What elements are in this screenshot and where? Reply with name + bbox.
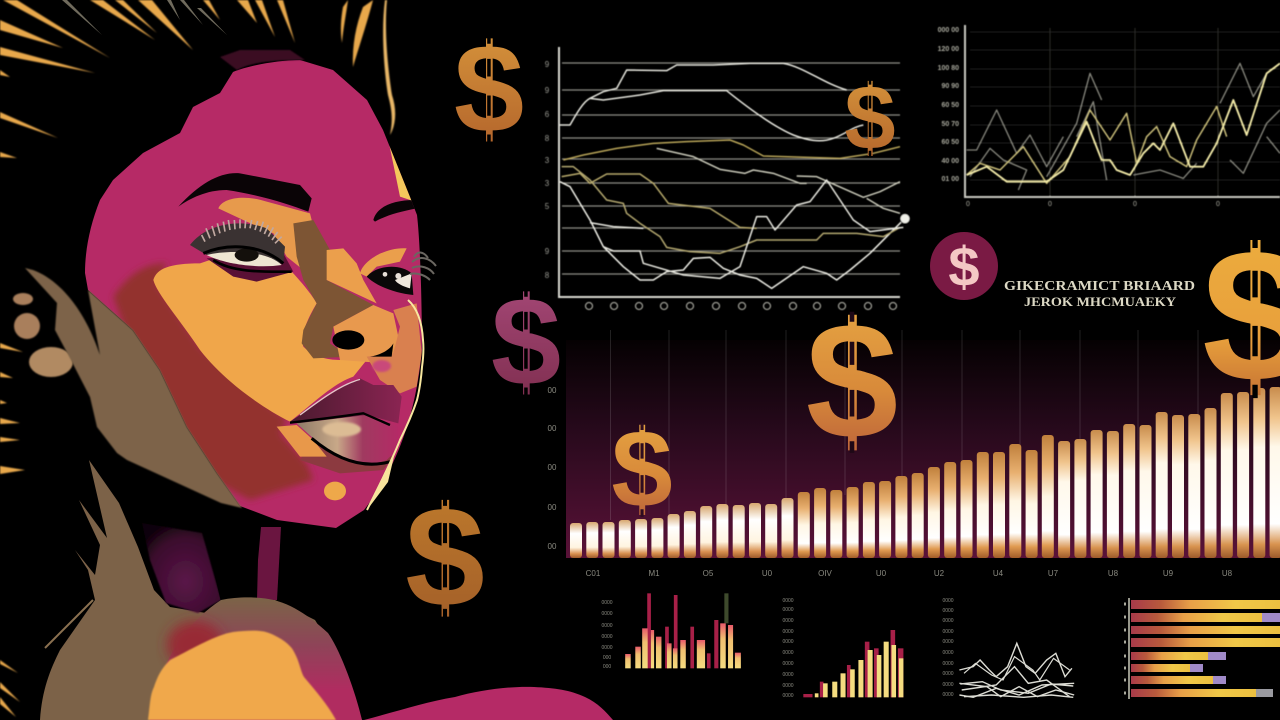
mini D ticks <box>1124 604 1126 693</box>
bar chart panel <box>566 340 1280 558</box>
mini B labels: 0000 <box>782 661 794 667</box>
bar chart x labels: O5 <box>703 569 714 578</box>
mini A bars <box>625 593 741 668</box>
red cheek shade <box>113 263 313 500</box>
chart2 x ticks: 0 <box>1216 201 1220 208</box>
mini B labels: 0000 <box>782 639 794 645</box>
chart2 grid <box>970 28 1280 196</box>
shoulder highlight <box>148 631 336 720</box>
bars: right section <box>1058 387 1280 558</box>
mini A labels <box>601 600 613 670</box>
lip highlight <box>322 422 361 437</box>
chart2 y labels: 120 00 <box>938 46 959 53</box>
lash strokes <box>202 219 282 243</box>
bar chart x labels: U4 <box>993 569 1004 578</box>
nostril <box>332 330 364 350</box>
chin shadow <box>300 444 392 474</box>
chart1 y labels: 9 <box>545 247 550 256</box>
bar chart x labels: U8 <box>1222 569 1233 578</box>
chart2 x ticks <box>966 201 1220 208</box>
chart1 y labels: 9 <box>545 86 550 95</box>
mini D gradient bars <box>1131 600 1280 697</box>
line chart: multi-series top middle <box>545 47 910 310</box>
mini C lines <box>959 643 1074 697</box>
dollar sign: on line chart: $ <box>844 67 896 169</box>
bar chart x labels: C01 <box>586 569 601 578</box>
neck thin arm <box>45 600 93 648</box>
dollar sign: small over bars: $ <box>611 408 673 531</box>
lip line <box>290 413 390 425</box>
mini A labels: 0000 <box>601 645 613 651</box>
shoulder pink base <box>150 597 362 720</box>
bar chart grid <box>610 330 1198 520</box>
brand caption <box>1004 279 1195 309</box>
bar chart x labels: U2 <box>934 569 945 578</box>
mini A labels: 0000 <box>601 611 613 617</box>
dollar signs <box>405 18 1280 637</box>
bar chart x labels: U0 <box>876 569 887 578</box>
lash base <box>190 223 285 263</box>
chart2 y labels: 90 90 <box>941 83 959 90</box>
bar chart x labels: M1 <box>648 569 660 578</box>
mini C labels: 0000 <box>942 650 954 656</box>
chart2 y labels: 000 00 <box>938 27 959 34</box>
bar chart x labels: U8 <box>1108 569 1119 578</box>
illustration: woman's portrait <box>0 0 613 720</box>
bar chart y labels: 00 <box>548 424 557 433</box>
chart2 y labels: 01 00 <box>941 176 959 183</box>
upper lip <box>290 378 402 423</box>
shoulder red glow <box>167 621 223 669</box>
upper-lip skin <box>367 303 422 393</box>
nose bridge highlight <box>327 248 377 303</box>
right eye dark <box>367 267 413 295</box>
caption line 1: GIKECRAMICT BRIAARD <box>1004 279 1195 294</box>
mini A labels: 0000 <box>601 623 613 629</box>
face base <box>85 60 422 528</box>
logo badge with dollar sign <box>930 232 998 300</box>
mini C labels: 0000 <box>942 692 954 698</box>
neck magenta strip <box>257 527 281 600</box>
dollar sign: centre large: $ <box>806 289 898 474</box>
mini B labels: 0000 <box>782 607 794 613</box>
mini A labels: 000 <box>603 655 611 661</box>
mini C labels <box>942 598 954 698</box>
right eye highlight <box>383 272 387 277</box>
bar chart y labels <box>548 386 557 551</box>
nose crease <box>370 343 393 357</box>
bar chart y labels: 00 <box>548 503 557 512</box>
logo dollar: $ <box>948 235 980 298</box>
bars: middle section <box>798 435 1054 558</box>
small chart: mixed bars <box>601 593 741 670</box>
right eye lashes <box>410 253 436 280</box>
small chart: rising bars <box>782 598 903 699</box>
facial details <box>113 140 422 500</box>
bottom pink shape <box>364 687 613 720</box>
mini C labels: 0000 <box>942 618 954 624</box>
left eye <box>190 219 293 282</box>
cheek edge highlight <box>367 300 423 510</box>
eye bottom line <box>213 260 292 272</box>
right eye socket <box>360 248 407 277</box>
mini C labels: 0000 <box>942 608 954 614</box>
chart1 y labels: 8 <box>545 134 550 143</box>
neck maroon shadow <box>142 523 221 613</box>
right brow <box>373 200 417 222</box>
bar chart x labels <box>586 569 1233 578</box>
chart2 x ticks: 0 <box>966 201 970 208</box>
bar chart x labels: U0 <box>762 569 773 578</box>
chart1 series <box>560 63 910 288</box>
under-eye maroon <box>207 253 293 282</box>
yellow cheek <box>153 260 367 422</box>
mini C labels: 0000 <box>942 661 954 667</box>
chart1 y labels: 8 <box>545 271 550 280</box>
hair strands: top and left <box>0 0 395 717</box>
bar chart x labels: U7 <box>1048 569 1059 578</box>
mini B labels <box>782 598 794 699</box>
mini C labels: 0000 <box>942 682 954 688</box>
small chart: horizontal bars <box>1124 598 1280 699</box>
left brow <box>178 173 312 212</box>
yellow forehead sliver <box>390 146 412 200</box>
chart2 y labels: 60 50 <box>941 139 959 146</box>
philtrum spot <box>372 360 391 372</box>
chart1 y labels <box>545 60 550 280</box>
mini B bars <box>803 630 903 697</box>
mini C labels: 0000 <box>942 629 954 635</box>
earring beads <box>13 293 73 377</box>
mini B labels: 0000 <box>782 650 794 656</box>
chart2 series <box>967 63 1280 190</box>
mini A labels: 0000 <box>601 600 613 606</box>
mini A labels: 000 <box>603 664 611 670</box>
large bar chart: rising revenue <box>548 330 1280 578</box>
right eye highlight 2 <box>395 273 401 279</box>
chart1 y labels: 6 <box>545 110 550 119</box>
chart1 y labels: 9 <box>545 60 550 69</box>
bar chart x labels: U9 <box>1163 569 1174 578</box>
tan jaw shadow <box>25 268 242 508</box>
mini C labels: 0000 <box>942 598 954 604</box>
mini B labels: 0000 <box>782 618 794 624</box>
mini C labels: 0000 <box>942 639 954 645</box>
right eye white <box>395 273 412 288</box>
mini B labels: 0000 <box>782 683 794 689</box>
chin yellow wedge <box>367 452 395 510</box>
dollar sign: maroon: $ <box>491 271 561 412</box>
nose tip <box>333 305 398 363</box>
small chart: line tangle <box>942 598 1074 698</box>
mini D axis <box>1128 598 1130 699</box>
chin dimple <box>324 482 346 500</box>
bar chart y labels: 00 <box>548 542 557 551</box>
chart2 y labels: 40 00 <box>941 158 959 165</box>
chart2 y labels: 100 80 <box>938 65 959 72</box>
iris <box>235 248 259 262</box>
hair strands: grey <box>62 0 227 35</box>
shoulder <box>148 597 362 720</box>
chart1 y labels: 5 <box>545 202 550 211</box>
chart2 y labels: 50 70 <box>941 121 959 128</box>
bar chart y labels: 00 <box>548 386 557 395</box>
caption line 2: JEROK MHCMUAEKY <box>1024 294 1177 309</box>
lower lip <box>297 415 398 463</box>
forehead shadow <box>220 50 305 70</box>
dollar sign: top left: $ <box>454 18 524 159</box>
orange patch under lip <box>277 425 327 457</box>
mini B labels: 0000 <box>782 693 794 699</box>
chart2 axes <box>965 25 1280 197</box>
neck and shoulder shadow <box>40 460 362 720</box>
eye white <box>207 252 282 266</box>
chart2 x ticks: 0 <box>1048 201 1052 208</box>
nose shadow <box>293 220 373 358</box>
dollar sign: lower left: $ <box>405 478 485 637</box>
mini C labels: 0000 <box>942 671 954 677</box>
bar chart x labels: OIV <box>818 569 833 578</box>
chart2 y labels: 60 50 <box>941 102 959 109</box>
bars: left section <box>570 498 794 558</box>
lower lip line <box>312 438 390 464</box>
chart1 y labels: 3 <box>545 156 550 165</box>
chart1 y labels: 3 <box>545 179 550 188</box>
chart1 x ticks <box>586 302 896 310</box>
chart2 x ticks: 0 <box>1133 201 1137 208</box>
mini B labels: 0000 <box>782 672 794 678</box>
bar chart y labels: 00 <box>548 463 557 472</box>
mini D purple ends <box>1190 613 1280 697</box>
eye socket orange <box>218 198 317 270</box>
line chart: top right <box>938 25 1280 208</box>
chart1 grid <box>562 63 900 274</box>
logo circle <box>930 232 998 300</box>
eye top line <box>203 247 283 263</box>
right eye <box>367 267 413 295</box>
neck black band <box>202 520 262 602</box>
mini A labels: 0000 <box>601 634 613 640</box>
mini B labels: 0000 <box>782 598 794 604</box>
mini B labels: 0000 <box>782 629 794 635</box>
chart2 y labels <box>938 27 959 183</box>
chart1 axes <box>559 47 900 297</box>
upper lip shine <box>300 379 360 415</box>
